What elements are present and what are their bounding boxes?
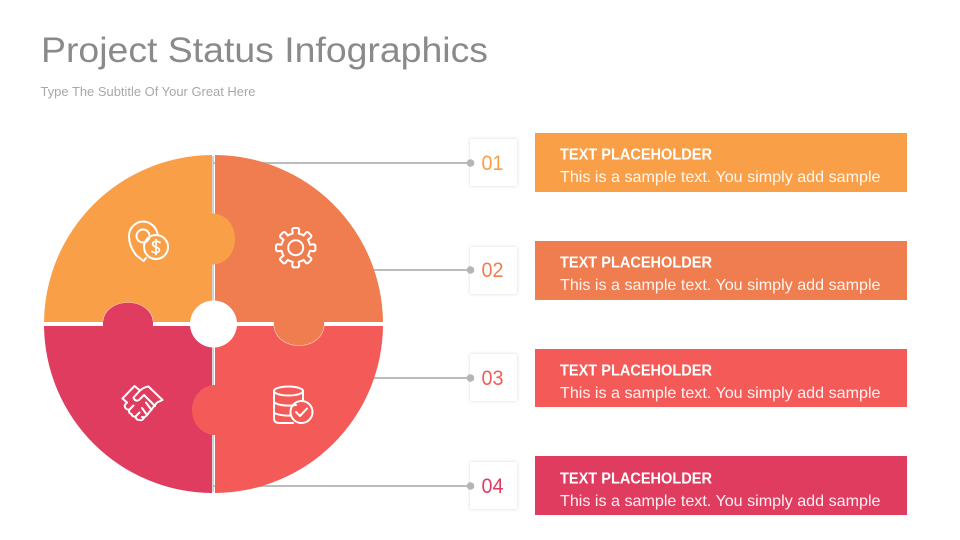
title: Project Status Infographics <box>41 31 488 70</box>
subtitle: Type The Subtitle Of Your Great Here <box>40 85 256 99</box>
connector: 04 <box>213 485 470 487</box>
icon: gear <box>276 228 315 267</box>
text bar 04: TEXT PLACEHOLDER <box>560 470 712 488</box>
icon: location pin with dollar <box>129 222 168 261</box>
tab: red <box>192 385 216 435</box>
tab: orange <box>211 214 235 264</box>
text bar 02 <box>535 241 907 300</box>
text bar 01: TEXT PLACEHOLDER <box>560 146 712 164</box>
tab: coral <box>274 321 324 346</box>
connector: 01 <box>213 162 470 164</box>
text bar 03 <box>535 349 907 407</box>
tab outline: crimson <box>103 302 153 321</box>
text bar 03: This is a sample text. You simply add sample <box>560 385 881 402</box>
number box 01: 01 <box>482 151 504 175</box>
number box 03 <box>467 354 517 401</box>
text bar 04: This is a sample text. You simply add sample <box>560 493 881 510</box>
number box 04 <box>467 462 517 509</box>
number box 02 <box>467 247 517 294</box>
connector: 03 <box>360 377 470 379</box>
tab: crimson <box>103 302 153 327</box>
number box 04: 04 <box>482 474 504 498</box>
row 03 <box>467 349 907 407</box>
tab outline: coral <box>274 326 324 346</box>
text bar 03: TEXT PLACEHOLDER <box>560 362 712 380</box>
row 01 <box>467 133 907 192</box>
connector: 02 <box>360 269 470 271</box>
number box 02: 02 <box>482 258 504 282</box>
icon: handshake <box>122 386 162 420</box>
icon: database with check <box>274 386 312 423</box>
text bar 02: This is a sample text. You simply add sample <box>560 277 881 294</box>
puzzle piece: crimson <box>44 326 212 493</box>
puzzle piece: orange <box>44 155 212 322</box>
text bar 01 <box>535 133 907 192</box>
puzzle circle diagram <box>44 155 383 493</box>
number box 01 <box>467 139 517 186</box>
text bar 02: TEXT PLACEHOLDER <box>560 254 712 272</box>
puzzle piece: red <box>215 326 383 493</box>
center hole <box>190 300 237 348</box>
row 02 <box>467 241 907 300</box>
number box 03: 03 <box>482 366 504 390</box>
row 04 <box>467 456 907 515</box>
puzzle piece: coral <box>215 155 383 322</box>
text bar 01: This is a sample text. You simply add sample <box>560 169 881 186</box>
text bar 04 <box>535 456 907 515</box>
